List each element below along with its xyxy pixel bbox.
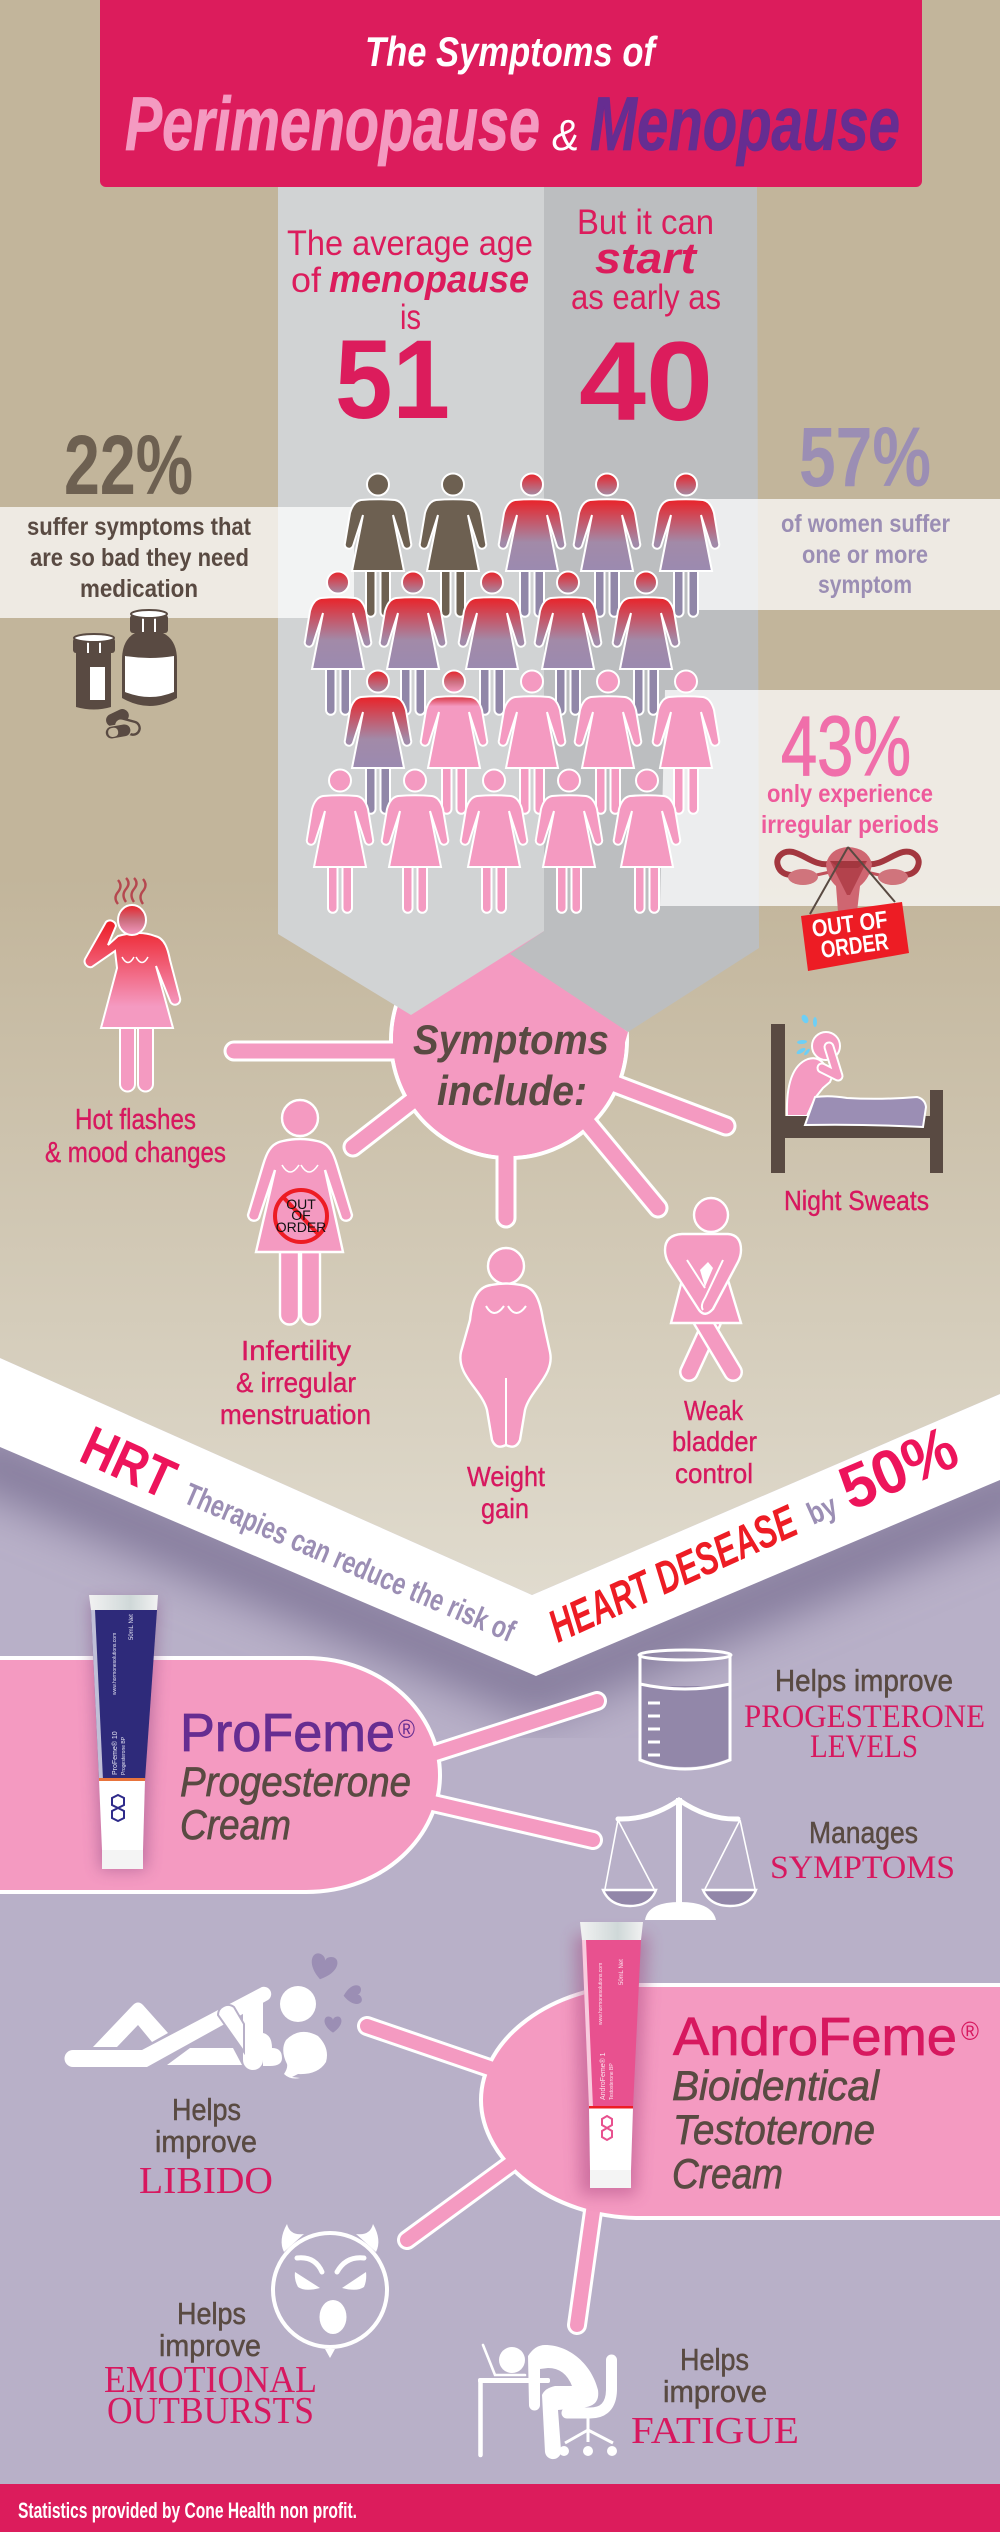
stat: 22 percent: 22% (64, 418, 193, 512)
caption: progesterone levels (744, 1663, 985, 1765)
text block: average age: is (400, 298, 421, 337)
product tube: ProFeme: ProFeme® 10 (111, 1731, 119, 1775)
heading: symptoms include: Symptoms (413, 1016, 609, 1063)
caption: emotional outbursts: EMOTIONAL (104, 2359, 317, 2401)
text block: average age: 51 (335, 317, 450, 442)
product type: progesterone cream (180, 1758, 411, 1848)
product type: bioidentical testosterone cream (672, 2062, 881, 2197)
header banner (100, 0, 922, 187)
symptom: weak bladder (665, 1198, 757, 1489)
caption: manages symptoms: Manages (809, 1815, 918, 1850)
chevron banner (0, 1358, 1000, 1676)
stat: 22 percent: medication (80, 575, 198, 603)
product name: AndroFeme: AndroFeme (673, 2007, 957, 2067)
band: 22 percent (0, 507, 354, 618)
product tube: AndroFeme: www.hormonesolutions.com (598, 1963, 604, 2025)
icon: uterus with out of order sign: OUT OF (810, 906, 889, 943)
caption: emotional outbursts: Helps (177, 2296, 246, 2331)
caption: fatigue: FATIGUE (631, 2410, 799, 2452)
symptom: weak bladder: control (675, 1458, 753, 1489)
symptom: infertility: OF (291, 1207, 311, 1223)
product type: bioidentical testosterone cream: Testoterone (673, 2106, 875, 2153)
product tube: AndroFeme (575, 1922, 648, 2195)
symptom: weight gain (460, 1248, 551, 1524)
icon: medicine bottles (73, 610, 177, 740)
stat: 43 percent: only experience (767, 780, 933, 808)
band: 43 percent (660, 690, 1000, 906)
caption: libido: improve (155, 2124, 257, 2159)
figure grid: women pictograms (305, 474, 719, 913)
stat: 57 percent: 57% (799, 410, 931, 504)
background: tan upper section (0, 0, 1000, 1595)
text block: average age (287, 224, 533, 442)
symptom: hot flashes: & mood changes (45, 1137, 226, 1169)
banner text: HRT: HRT (72, 1414, 186, 1511)
registered mark: ® (961, 2016, 979, 2046)
caption: emotional outbursts: improve (159, 2328, 261, 2363)
product type: progesterone cream: Progesterone (180, 1758, 411, 1805)
product name: ProFeme: ProFeme (180, 1703, 395, 1763)
symptom: infertility: OUT (286, 1196, 316, 1212)
symptom: weak bladder: bladder (672, 1426, 757, 1457)
banner text: 50 percent: 50% (830, 1413, 968, 1524)
symptom: weight gain: Weight (467, 1461, 545, 1492)
banner text: therapies: Therapies can reduce the risk of (179, 1476, 521, 1649)
banner text: by: by (802, 1487, 843, 1531)
product tube: AndroFeme: Testosterone BP (609, 2063, 615, 2100)
panel: right grey column (510, 187, 759, 1032)
product type: bioidentical testosterone cream: Bioidentical (672, 2062, 881, 2109)
title line 2: & (552, 111, 579, 160)
icon: beaker (639, 1650, 731, 1769)
banner text: heart disease: HEART DESEASE (541, 1494, 805, 1652)
caption: progesterone levels: LEVELS (810, 1729, 918, 1765)
caption: manages symptoms: SYMPTOMS (770, 1850, 955, 1886)
symptom: infertility: Infertility (241, 1335, 351, 1366)
caption: progesterone levels: PROGESTERONE (744, 1699, 985, 1735)
capsules (103, 706, 141, 740)
symptom: hot flashes (45, 878, 226, 1169)
title line 1: The Symptoms of (365, 28, 658, 75)
text block: start age: 40 (579, 319, 713, 444)
icon: uterus with out of order sign: ORDER (819, 928, 890, 964)
stat: 57 percent: symptom (818, 571, 912, 599)
product tube: ProFeme (89, 1595, 158, 1870)
text block: start age: But it can (577, 203, 714, 242)
panel: AndroFeme (367, 1985, 1000, 2325)
text block: average age: menopause (329, 259, 529, 301)
symptom: night sweats: Night Sweats (784, 1185, 929, 1216)
stat: 57 percent (781, 410, 950, 599)
stat: 22 percent: suffer symptoms that (27, 513, 252, 541)
title line 2: Menopause (590, 82, 900, 167)
band: 57 percent (698, 499, 1000, 610)
caption: manages symptoms (770, 1815, 955, 1886)
stat: 43 percent (761, 699, 939, 839)
icon: tired person at desk (478, 2345, 617, 2459)
symptom: infertility: ORDER (276, 1219, 326, 1235)
title line 2: Perimenopause (125, 82, 540, 167)
caption: fatigue: improve (663, 2374, 767, 2409)
stat: 43 percent: 43% (781, 699, 911, 793)
caption: libido (139, 2092, 273, 2202)
symptom: weak bladder: Weak (684, 1395, 744, 1426)
symptom: infertility (220, 1100, 371, 1430)
caption: emotional outbursts: OUTBURSTS (107, 2390, 314, 2432)
product tube: ProFeme: 50mL Net (129, 1614, 135, 1640)
icon: angry devil face (273, 2224, 387, 2358)
chevron shadow (0, 1450, 1000, 1690)
product type: progesterone cream: Cream (180, 1801, 291, 1848)
product type: bioidentical testosterone cream: Cream (672, 2150, 783, 2197)
caption: progesterone levels: Helps improve (775, 1663, 953, 1698)
symptom: night sweats (771, 1014, 943, 1216)
symptom: infertility: & irregular (236, 1367, 356, 1398)
stat: 22 percent (27, 418, 252, 603)
stat: 57 percent: of women suffer (781, 510, 950, 538)
panel: ProFeme (0, 1658, 597, 1892)
icon: balance scale (603, 1798, 756, 1920)
heading: symptoms include: include: (437, 1067, 587, 1114)
text block: start age: start (595, 234, 698, 283)
symptom: hot flashes: Hot flashes (75, 1104, 196, 1136)
caption: libido: LIBIDO (139, 2160, 273, 2202)
text block: start age (571, 203, 721, 444)
icon: uterus with out of order sign (777, 847, 919, 971)
footer bar (0, 2484, 1000, 2532)
product tube: AndroFeme: 50mL Net (619, 1959, 625, 1985)
footer text: Statistics provided by Cone Health non profit. (18, 2498, 357, 2523)
product tube: ProFeme: Progesterone BP (121, 1736, 127, 1775)
symptom: weight gain: gain (481, 1493, 529, 1524)
stat: 57 percent: one or more (802, 541, 928, 569)
caption: fatigue (631, 2342, 799, 2452)
stat: 43 percent: irregular periods (761, 811, 939, 839)
caption: emotional outbursts (104, 2296, 317, 2432)
caption: fatigue: Helps (680, 2342, 749, 2377)
icon: couple with hearts (64, 1952, 362, 2078)
stat: 22 percent: are so bad they need (30, 544, 249, 572)
product tube: ProFeme: www.hormonesolutions.com (112, 1633, 118, 1695)
symptoms hub with spokes (234, 922, 726, 1218)
text block: start age: as early as (571, 278, 721, 317)
product tube: AndroFeme: AndroFeme® 1 (599, 2052, 607, 2100)
caption: libido: Helps (172, 2092, 241, 2127)
symptom: infertility: menstruation (220, 1399, 371, 1430)
registered mark: ® (398, 1714, 415, 1744)
text block: average age: of (291, 261, 321, 300)
panel: left grey column (278, 187, 544, 1015)
text block: average age: The average age (287, 224, 533, 263)
heading: symptoms include (413, 1016, 609, 1114)
